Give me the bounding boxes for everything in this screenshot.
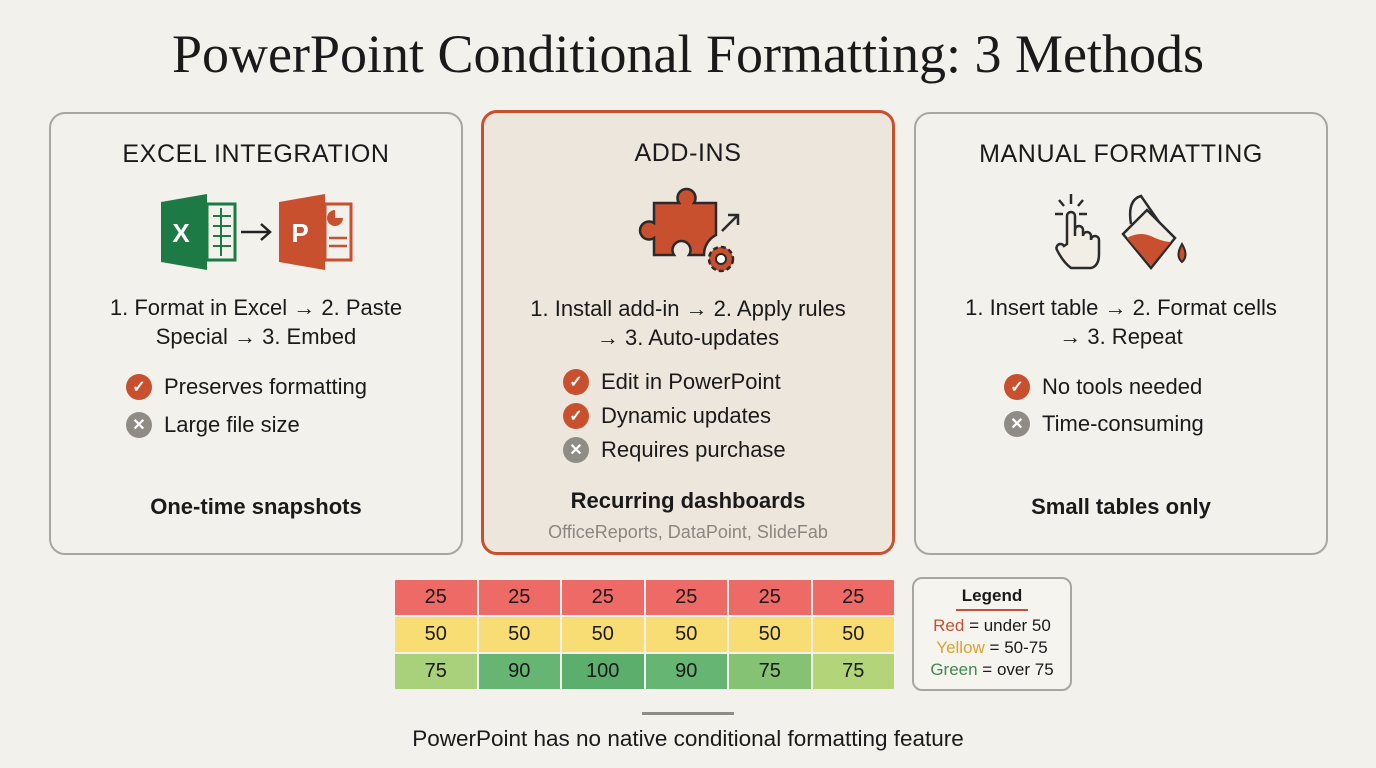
heatmap table: 75 [759, 660, 781, 682]
icon: hand and paint bucket [1055, 194, 1186, 270]
pros/cons: Edit in PowerPoint [601, 369, 781, 394]
heatmap table: 50 [842, 623, 864, 645]
pros/cons: ✓ [1010, 379, 1024, 396]
heading: MANUAL FORMATTING [979, 140, 1263, 168]
panel: add-ins [481, 110, 895, 555]
pros/cons: ✓ [132, 379, 146, 396]
heatmap table: 75 [842, 660, 864, 682]
heatmap table [394, 579, 895, 690]
heading: ADD-INS [634, 139, 741, 167]
best for: One-time snapshots [150, 494, 362, 519]
steps: → 3. Repeat [1059, 324, 1183, 349]
heatmap table: 25 [675, 586, 697, 608]
heatmap table: 50 [425, 623, 447, 645]
legend: Yellow = 50-75 [936, 638, 1048, 657]
heatmap table: 50 [759, 623, 781, 645]
legend [912, 577, 1072, 691]
best for: Small tables only [1031, 494, 1211, 519]
legend: Red = under 50 [933, 616, 1051, 635]
steps: Special → 3. Embed [156, 324, 356, 349]
tool examples: OfficeReports, DataPoint, SlideFab [548, 522, 828, 542]
panel: excel integration [49, 112, 463, 555]
heatmap table: 90 [675, 660, 697, 682]
pros/cons: No tools needed [1042, 374, 1202, 399]
heatmap table: 50 [675, 623, 697, 645]
pros/cons: ✓ [569, 374, 583, 391]
icon: excel to powerpoint: X [172, 218, 190, 248]
icon: excel to powerpoint: P [291, 218, 309, 248]
steps [530, 296, 846, 350]
panel: manual formatting: ✕ [1010, 416, 1024, 433]
panel: add-ins: ✕ [569, 442, 583, 459]
title: PowerPoint Conditional Formatting: 3 Methods [172, 24, 1204, 84]
heading: EXCEL INTEGRATION [122, 140, 390, 168]
heatmap table: 75 [425, 660, 447, 682]
legend: Green = over 75 [930, 660, 1054, 679]
steps: → 3. Auto-updates [597, 325, 779, 350]
steps: 1. Format in Excel → 2. Paste [110, 295, 402, 320]
legend: Legend [962, 586, 1022, 605]
heatmap table: 50 [592, 623, 614, 645]
steps: 1. Install add-in → 2. Apply rules [530, 296, 846, 321]
icon: puzzle with gear [638, 188, 740, 272]
pros/cons: Preserves formatting [164, 374, 367, 399]
panel: manual formatting [914, 112, 1328, 555]
footer note: PowerPoint has no native conditional formatting feature [412, 726, 964, 751]
heatmap table: 90 [508, 660, 530, 682]
steps [965, 295, 1277, 349]
heatmap table: 25 [759, 586, 781, 608]
heatmap table: 25 [508, 586, 530, 608]
heatmap table: 50 [508, 623, 530, 645]
heatmap table: 100 [586, 660, 619, 682]
heatmap table: 25 [425, 586, 447, 608]
icon: excel to powerpoint [161, 194, 352, 270]
best for: Recurring dashboards [571, 488, 805, 513]
panel: excel integration: Large file size [164, 412, 300, 437]
panel: add-ins: ✓ [569, 408, 583, 425]
panel: manual formatting: Time-consuming [1042, 411, 1204, 436]
heatmap table: 25 [592, 586, 614, 608]
steps [110, 295, 402, 349]
heatmap table: 25 [842, 586, 864, 608]
steps: 1. Insert table → 2. Format cells [965, 295, 1277, 320]
panel: excel integration: ✕ [132, 417, 146, 434]
panel: add-ins: Requires purchase [601, 437, 786, 462]
panel: add-ins: Dynamic updates [601, 403, 771, 428]
